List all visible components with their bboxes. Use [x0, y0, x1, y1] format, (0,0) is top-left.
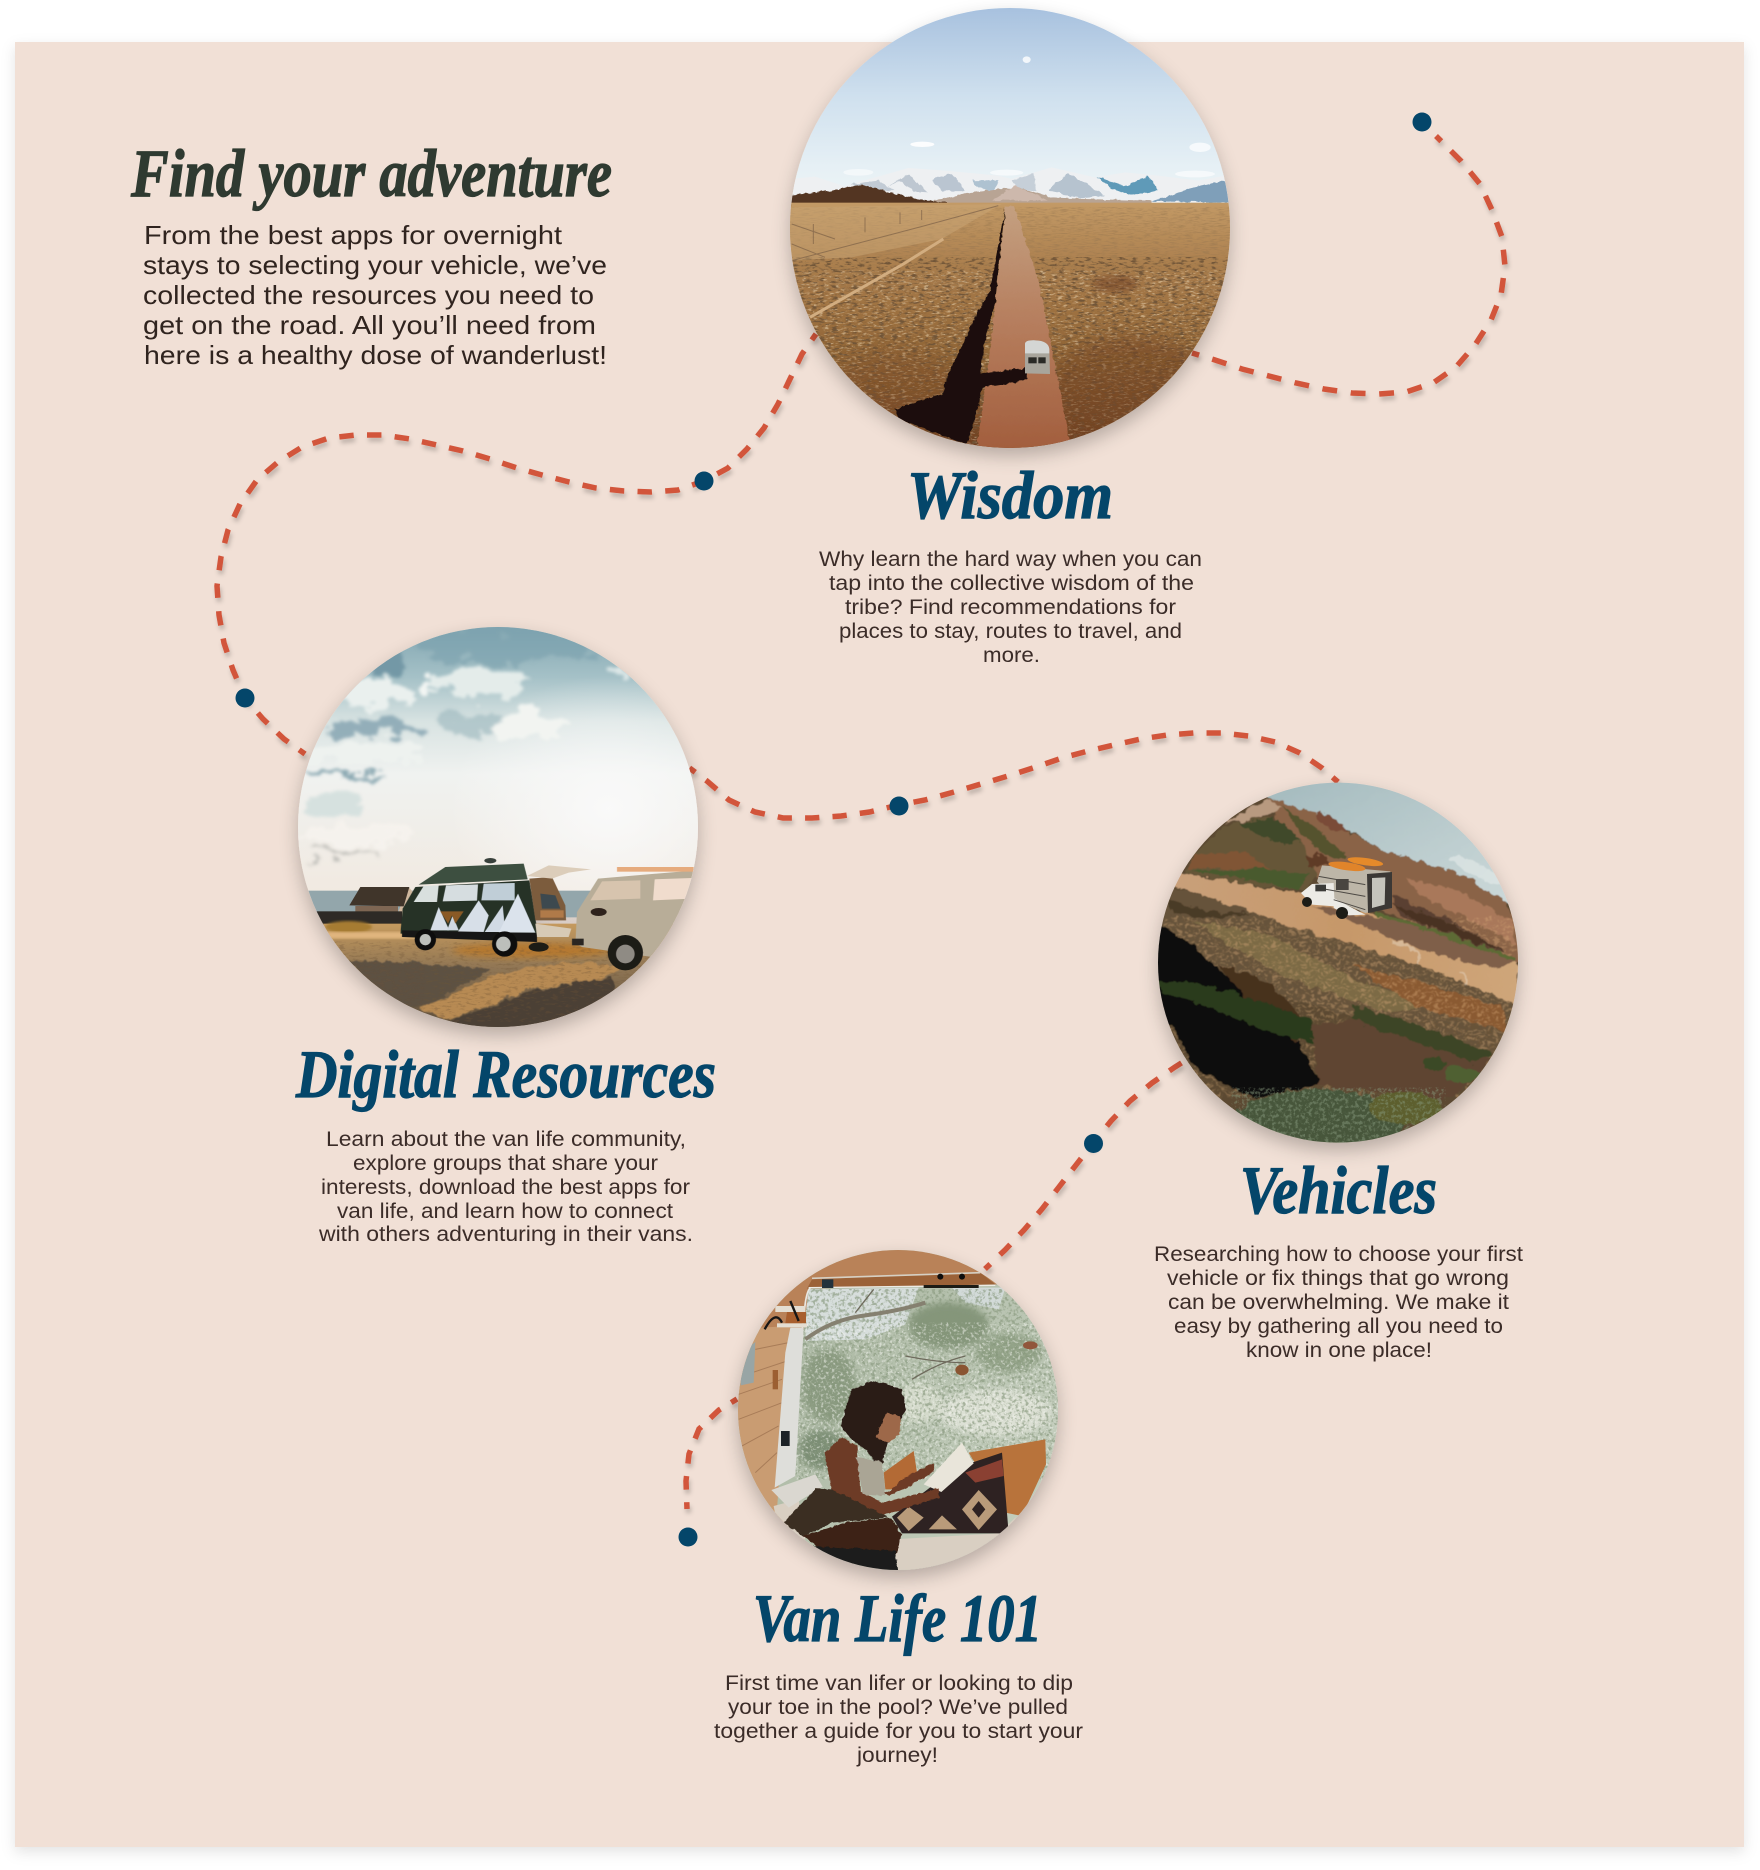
body: Vehicles: easy by gathering all you need to	[1174, 1315, 1503, 1338]
body: Vehicles: vehicle or fix things that go wrong	[1167, 1267, 1509, 1290]
intro paragraph: From the best apps for overnight	[144, 220, 563, 250]
photo: camper on coastal road	[1145, 771, 1531, 1157]
body: Vehicles: know in one place!	[1246, 1339, 1432, 1362]
heading: Vehicles: Vehicles	[1240, 1152, 1437, 1228]
body: Wisdom: tap into the collective wisdom of the	[829, 572, 1194, 595]
intro paragraph: here is a healthy dose of wanderlust!	[144, 340, 607, 370]
body: Wisdom: tribe? Find recommendations for	[845, 596, 1176, 619]
body: Wisdom: Why learn the hard way when you can	[819, 548, 1202, 571]
body: Digital Resources: Learn about the van life community,	[326, 1128, 686, 1151]
intro paragraph: collected the resources you need to	[143, 280, 594, 310]
route dot 1	[1412, 112, 1432, 132]
route dot 4	[890, 796, 908, 816]
body: Digital Resources: explore groups that share your	[353, 1152, 658, 1175]
body: Digital Resources	[318, 1128, 693, 1246]
body: Van Life 101: together a guide for you to start your	[714, 1720, 1083, 1743]
route segment: Wisdom to Digital Resources	[217, 334, 816, 754]
body: Digital Resources: interests, download the best apps for	[321, 1176, 690, 1199]
body: Wisdom: more.	[983, 644, 1040, 667]
heading: Digital Resources: Digital Resources	[295, 1036, 716, 1112]
body: Vehicles: Researching how to choose your first	[1154, 1243, 1523, 1266]
body: Van Life 101: your toe in the pool? We’ve pulled	[728, 1696, 1068, 1719]
photo: vans by the sea	[288, 626, 708, 1044]
body: Digital Resources: with others adventuring in their vans.	[318, 1223, 693, 1246]
intro paragraph	[143, 220, 607, 370]
route segment: Digital Resources to Vehicles	[690, 733, 1338, 818]
heading: Wisdom: Wisdom	[907, 457, 1113, 533]
route dot 5	[1084, 1134, 1103, 1153]
body: Wisdom	[819, 548, 1202, 667]
body: Van Life 101: First time van lifer or looking to dip	[725, 1672, 1073, 1695]
route: dashed path segments	[217, 136, 1505, 1509]
route dot 2	[694, 472, 714, 490]
route segment: Van Life 101 to end	[686, 1399, 737, 1509]
intro paragraph: get on the road. All you’ll need from	[143, 310, 596, 340]
photo: van on dirt road	[785, 4, 1235, 454]
intro paragraph: stays to selecting your vehicle, we’ve	[143, 250, 607, 280]
body: Vehicles	[1154, 1243, 1523, 1362]
body: Vehicles: can be overwhelming. We make it	[1168, 1291, 1509, 1314]
body: Van Life 101: journey!	[856, 1744, 938, 1767]
route segment: Vehicles to Van Life 101	[985, 1052, 1199, 1269]
photo: woman reading in van	[732, 1246, 1064, 1579]
route dot 6	[678, 1528, 698, 1546]
body: Wisdom: places to stay, routes to travel, and	[839, 620, 1182, 643]
heading: Van Life 101: Van Life 101	[753, 1580, 1042, 1656]
body: Digital Resources: van life, and learn how to connect	[337, 1200, 673, 1223]
route segment: start to Wisdom	[1192, 136, 1505, 394]
route dot 3	[236, 688, 254, 708]
body: Van Life 101	[714, 1672, 1083, 1767]
title: Find your adventure	[130, 135, 612, 211]
